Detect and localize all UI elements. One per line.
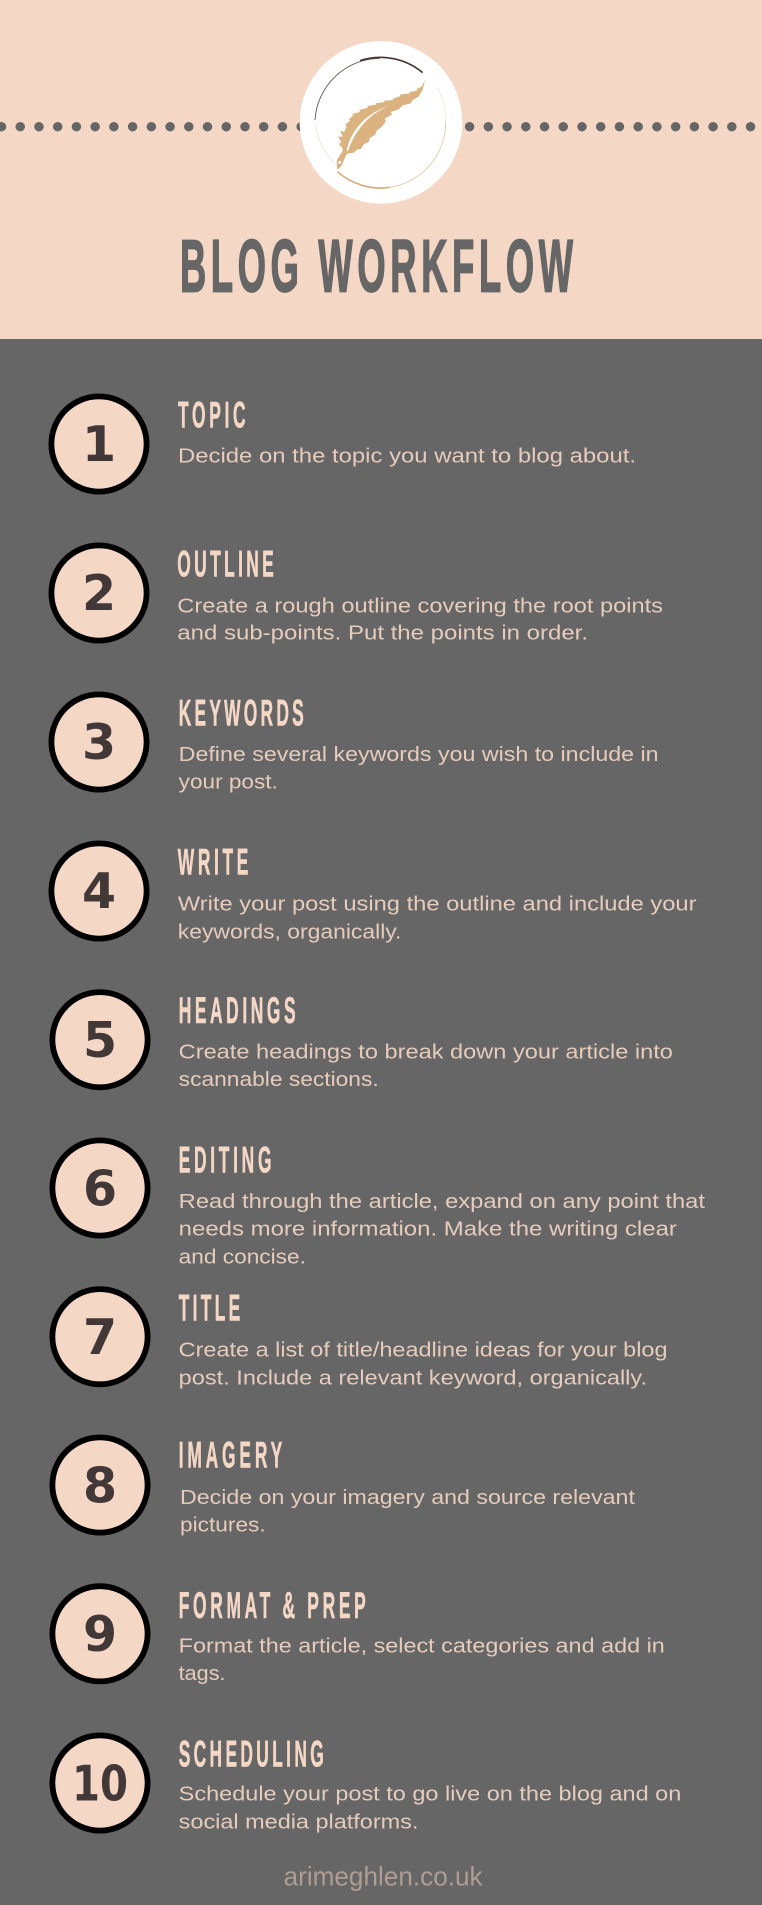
step 5: scannable sections. (179, 1068, 379, 1091)
step 8: pictures. (180, 1514, 266, 1537)
step 8: 8 (83, 1458, 117, 1514)
step 4: WRITE (178, 843, 248, 884)
step 10: social media platforms. (179, 1810, 418, 1833)
step 2 (51, 544, 663, 644)
step 8 (52, 1435, 635, 1537)
step 7: Create a list of title/headline ideas for your blog (179, 1339, 667, 1362)
step 1: 1 (82, 416, 116, 473)
step 6: EDITING (179, 1140, 271, 1181)
step 9 (52, 1586, 665, 1685)
step 3: 3 (82, 714, 116, 771)
step 2: OUTLINE (177, 544, 274, 585)
step 9: tags. (179, 1662, 226, 1685)
step 10: SCHEDULING (179, 1735, 324, 1776)
dotted line left (2, 122, 306, 131)
step 3 (51, 693, 659, 794)
step 9: 9 (83, 1606, 117, 1663)
step 2: 2 (82, 565, 116, 622)
step 4: keywords, organically. (178, 920, 401, 943)
step 10: 10 (72, 1756, 128, 1812)
step 10 (52, 1735, 681, 1833)
step 5: Create headings to break down your article into (179, 1040, 673, 1063)
step 1: Decide on the topic you want to blog about. (178, 445, 636, 468)
step 6: and concise. (179, 1245, 306, 1268)
footer url: arimeghlen.co.uk (284, 1862, 483, 1892)
step 8: IMAGERY (179, 1435, 282, 1476)
step 7: post. Include a relevant keyword, organically. (179, 1366, 647, 1389)
step 5: 5 (83, 1012, 117, 1069)
step 6: Read through the article, expand on any point that (179, 1190, 705, 1213)
step 5 (52, 991, 673, 1091)
step 6: needs more information. Make the writing clear (179, 1218, 677, 1241)
step 3: KEYWORDS (179, 693, 304, 734)
step 3: Define several keywords you wish to include in (179, 743, 659, 766)
step 9: FORMAT & PREP (179, 1586, 366, 1627)
step 4: Write your post using the outline and include your (178, 893, 697, 916)
step 6: 6 (83, 1160, 117, 1218)
panel: header (0, 0, 762, 339)
step 8: Decide on your imagery and source relevant (180, 1486, 635, 1509)
step 7 (52, 1289, 667, 1389)
step 5: HEADINGS (179, 991, 296, 1032)
icon: feather logo (300, 41, 462, 204)
step 6 (52, 1140, 705, 1268)
step 4 (51, 843, 697, 943)
dotted line right (470, 122, 762, 131)
step 2: Create a rough outline covering the root points (177, 594, 663, 617)
step 2: and sub-points. Put the points in order. (177, 621, 588, 644)
step 3: your post. (179, 771, 278, 794)
step 1: TOPIC (178, 395, 246, 436)
step 7: 7 (83, 1309, 117, 1366)
step 10: Schedule your post to go live on the blog and on (179, 1783, 681, 1806)
step 4: 4 (82, 863, 116, 920)
step 1 (51, 395, 636, 492)
step 7: TITLE (179, 1289, 240, 1330)
step 9: Format the article, select categories and add in (179, 1634, 665, 1657)
title: BLOG WORKFLOW (180, 225, 573, 308)
